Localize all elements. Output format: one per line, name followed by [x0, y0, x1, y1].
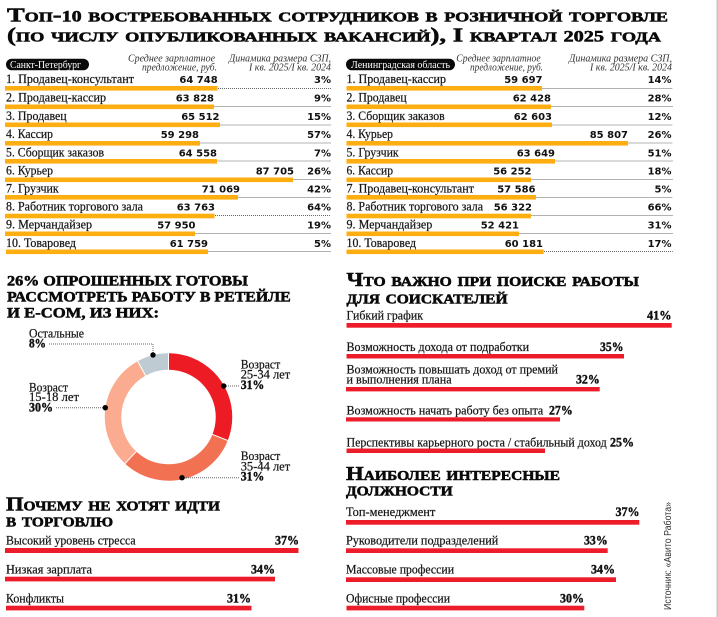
bar: low salary: 34% — [251, 562, 275, 576]
callout: age 25-34: 25-34 лет — [241, 368, 291, 382]
row 5: 63 649 — [517, 149, 555, 160]
heading: Что важно при поиске работы — [346, 269, 639, 291]
row 5 — [5, 146, 331, 164]
row 10: 10. Товаровед — [6, 236, 77, 250]
column headers: Среднее зарплатное — [456, 53, 541, 65]
callout: age 35-44: 31% — [241, 470, 264, 484]
row 2: 28% — [648, 94, 672, 104]
column headers: Динамика размера СЗП, — [568, 53, 672, 65]
row 5: 5. Грузчик — [346, 146, 400, 160]
bar: bonus income — [346, 363, 600, 391]
callout: age 25-34: 31% — [241, 378, 264, 392]
column headers: предложение, руб. — [142, 62, 217, 74]
row 2 — [346, 90, 673, 109]
row 8: 8. Работник торгового зала — [346, 200, 483, 214]
row 9 — [346, 218, 673, 236]
bar: conflicts: 31% — [227, 591, 251, 605]
row 4: 26% — [648, 130, 672, 141]
row 1 — [5, 72, 331, 91]
bar: office professions: 30% — [560, 592, 584, 606]
title: Топ- 10 востребованных сотрудников в розничной торговле — [7, 4, 668, 26]
panel: Leningrad region table — [346, 53, 673, 254]
row 5: 5. Сборщик заказов — [6, 146, 104, 160]
title — [7, 4, 668, 46]
bar: top management: Топ-менеджмент — [346, 505, 436, 519]
row 2: 2. Продавец-кассир — [6, 90, 106, 104]
row 2: 2. Продавец — [346, 90, 407, 104]
row 2 — [5, 90, 331, 109]
row 6 — [346, 164, 673, 182]
bar: flexible schedule: 41% — [647, 308, 672, 322]
heading: в торговлю — [6, 510, 113, 532]
row 7: 7. Грузчик — [6, 182, 60, 196]
bar: top management — [346, 505, 640, 525]
row 1: 59 697 — [504, 75, 543, 86]
bar: no experience: 27% — [549, 403, 573, 417]
row 7 — [346, 182, 673, 200]
column headers — [128, 53, 331, 74]
region tag: Leningrad region: Ленинградская область — [351, 59, 450, 71]
row 10: 17% — [648, 239, 672, 250]
row 4: 4. Кассир — [6, 127, 53, 141]
row 3 — [346, 109, 673, 127]
heading — [346, 463, 560, 500]
heading: для соискателей — [346, 286, 508, 308]
heading: 26% surveyed: РАССМОТРЕТЬ РАБОТУ В РЕТЕЙЛЕ — [7, 288, 291, 306]
row 7: 57 586 — [497, 184, 536, 196]
row 5: 64 558 — [179, 149, 217, 160]
row 8: 66% — [648, 203, 672, 214]
bar: department heads — [346, 533, 608, 553]
row 3: 15% — [307, 112, 331, 123]
row 2: 62 428 — [513, 94, 551, 104]
bar: office professions: Офисные профессии — [346, 592, 450, 606]
row 1 — [346, 72, 673, 91]
callout: age 15-18: 15-18 лет — [29, 390, 80, 404]
callout: others 8%: 8% — [29, 337, 46, 351]
row 8: 64% — [307, 203, 331, 214]
panel: Saint Petersburg table — [5, 53, 331, 254]
column headers: Среднее зарплатное — [128, 53, 215, 65]
bar: bonus income: и выполнения плана — [346, 373, 452, 387]
row 3: 65 512 — [181, 112, 220, 123]
row 9: 52 421 — [481, 221, 519, 232]
row 8: 56 322 — [494, 203, 532, 214]
row 4: 85 807 — [590, 130, 628, 141]
row 8: 63 763 — [177, 203, 215, 214]
row 6: 6. Кассир — [346, 164, 393, 178]
row 10: 61 759 — [170, 239, 208, 250]
bar: mass professions: Массовые профессии — [346, 563, 454, 577]
row 4 — [5, 127, 331, 146]
heading — [346, 269, 639, 308]
callout: age 15-18: Возраст — [29, 381, 68, 395]
row 7 — [5, 182, 331, 200]
row 5: 7% — [314, 149, 331, 160]
row 6: 87 705 — [256, 166, 294, 178]
source note: Источник: «Авито Работа» — [662, 502, 674, 610]
row 7: 7. Продавец-консультант — [346, 182, 475, 196]
bar: top management: 37% — [616, 505, 640, 519]
callout: age 25-34 — [221, 357, 291, 392]
bar: office professions — [346, 592, 584, 610]
heading: должности — [346, 478, 453, 500]
row 5 — [346, 146, 673, 164]
panel: most interesting positions — [346, 463, 640, 610]
region tag: Saint Petersburg: Санкт-Петербург — [10, 59, 81, 71]
row 1: 1. Продавец-кассир — [346, 72, 446, 86]
callout: age 35-44: 35-44 лет — [241, 459, 291, 473]
row 3 — [5, 109, 331, 127]
row 7: 42% — [307, 184, 331, 196]
callout: age 15-18: 30% — [29, 401, 53, 415]
column headers: I кв. 2025/I кв. 2024 — [589, 62, 672, 74]
row 1: 3% — [314, 75, 331, 86]
row 9: 31% — [648, 221, 672, 232]
bar: career prospects: Перспективы карьерного роста / стабильный доход — [346, 435, 607, 449]
bar: bonus income: 32% — [576, 373, 600, 387]
row 8 — [346, 200, 673, 218]
callout: others 8%: Остальные — [29, 327, 84, 341]
bar: flexible schedule — [346, 308, 672, 328]
row 8: 8. Работник торгового зала — [6, 200, 143, 214]
bar: flexible schedule: Гибкий график — [346, 308, 424, 322]
bar: mass professions: 34% — [591, 563, 615, 577]
row 1: 1. Продавец-консультант — [6, 72, 135, 86]
bar: department heads: 33% — [584, 533, 608, 547]
column headers: предложение, руб. — [470, 62, 543, 74]
row 6: 26% — [307, 166, 331, 178]
row 6: 18% — [648, 166, 672, 178]
row 9: 19% — [307, 221, 331, 232]
heading — [6, 493, 220, 532]
bar: side income: Возможность дохода от подработки — [346, 340, 529, 354]
row 10: 60 181 — [505, 239, 543, 250]
row 10 — [346, 236, 673, 254]
row 1: 14% — [648, 75, 672, 86]
title: (по числу опубликованных вакансий), I квартал 2025 года — [7, 24, 662, 46]
row 3: 3. Продавец — [6, 109, 67, 123]
column headers: Динамика размера СЗП, — [228, 53, 331, 65]
callout: age 25-34: Возраст — [241, 357, 281, 371]
callout: age 35-44 — [179, 449, 291, 484]
bar: side income: 35% — [600, 340, 624, 354]
callout: age 15-18 — [29, 381, 108, 415]
row 6: 6. Курьер — [6, 164, 53, 178]
heading: Наиболее интересные — [346, 463, 560, 485]
panel: what matters to job seekers — [346, 269, 672, 453]
row 6: 56 252 — [493, 166, 532, 178]
bar: no experience: Возможность начать работу без опыта — [346, 403, 544, 417]
row 9: 9. Мерчандайзер — [346, 218, 432, 232]
bar: stress: Высокий уровень стресса — [6, 533, 136, 547]
row 4: 57% — [307, 130, 331, 141]
bar: conflicts: Конфликты — [6, 591, 65, 605]
row 6 — [5, 164, 331, 182]
bar: department heads: Руководители подразделений — [346, 533, 499, 547]
row 9: 9. Мерчандайзер — [6, 218, 92, 232]
row 3: 3. Сборщик заказов — [346, 109, 445, 123]
heading: 26% surveyed: 26% ОПРОШЕННЫХ ГОТОВЫ — [7, 273, 248, 290]
row 1: 64 748 — [179, 75, 218, 86]
row 4: 59 298 — [161, 130, 199, 141]
row 4: 4. Курьер — [346, 127, 393, 141]
bar: low salary: Низкая зарплата — [6, 562, 92, 576]
callout: others 8% — [29, 327, 156, 358]
bar: conflicts — [6, 591, 252, 610]
heading: 26% surveyed — [7, 273, 291, 322]
row 3: 62 603 — [514, 112, 552, 123]
bar: no experience — [346, 403, 573, 422]
row 4 — [346, 127, 673, 146]
donut chart — [113, 352, 229, 472]
bar: mass professions — [346, 563, 616, 582]
callout: age 35-44: Возраст — [241, 449, 281, 463]
row 7: 71 069 — [202, 184, 240, 196]
row 2: 63 828 — [176, 94, 214, 104]
bar: stress: 37% — [275, 533, 299, 547]
column headers: I кв. 2025/I кв. 2024 — [248, 62, 331, 74]
row 8 — [5, 200, 331, 218]
bar: side income — [346, 340, 624, 358]
bar: career prospects: 25% — [610, 435, 634, 449]
panel: why people avoid retail — [5, 493, 299, 610]
row 5: 51% — [648, 149, 672, 160]
column headers — [456, 53, 672, 74]
bar: stress — [5, 533, 299, 553]
heading: 26% surveyed: И E-COM, ИЗ НИХ: — [7, 305, 159, 322]
heading: Почему не хотят идти — [6, 493, 220, 515]
bar: bonus income: Возможность повышать доход от премий — [346, 363, 558, 377]
row 10: 10. Товаровед — [346, 236, 417, 250]
row 9: 57 950 — [157, 221, 196, 232]
row 3: 12% — [648, 112, 672, 123]
row 10 — [6, 236, 331, 254]
row 7: 5% — [655, 184, 672, 196]
row 9 — [5, 218, 331, 236]
bar: low salary — [5, 562, 275, 581]
row 10: 5% — [314, 239, 331, 250]
row 2: 9% — [314, 94, 331, 104]
